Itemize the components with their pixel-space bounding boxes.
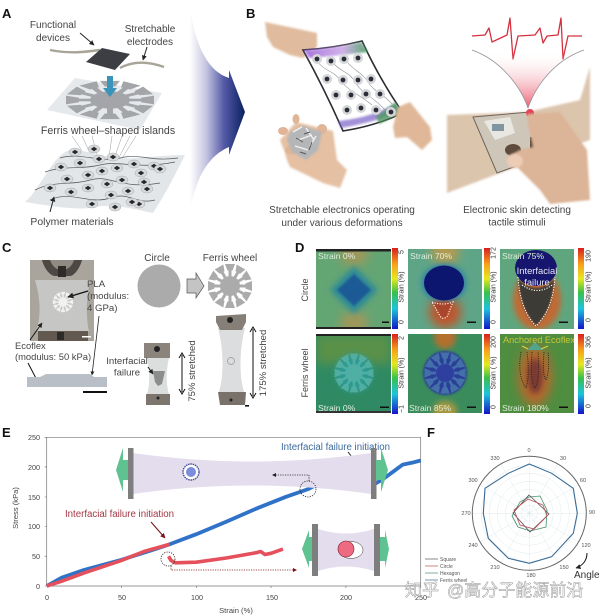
label: PLA modulus: (modulus: (87, 291, 129, 302)
strain map wheel 180% (500, 334, 575, 413)
angle labels: 120 (581, 543, 591, 549)
colorbar 4: −1 (398, 405, 406, 413)
hexagon series (512, 496, 547, 531)
angle labels: 180 (526, 573, 536, 579)
inset: circle specimen (302, 524, 389, 576)
x axis tick labels: 150 (266, 593, 278, 602)
y axis tick labels: 200 (28, 463, 40, 472)
row label circle: Circle (300, 278, 310, 302)
colorbar 2 (484, 247, 498, 329)
strain map circle 75%: Strain 75% (502, 251, 544, 261)
x axis tick labels (45, 593, 427, 602)
stretchable sheet with circuit islands (303, 41, 403, 131)
legend: Hexagon (440, 571, 460, 577)
ferris wheel plate (47, 78, 162, 130)
hand holding sheet right (393, 102, 432, 150)
panel B: applications (246, 6, 590, 229)
transition arrow circle to wheel (187, 273, 204, 298)
specimen photo (30, 260, 94, 341)
x axis title: Strain (%) (219, 606, 253, 615)
row label ferris wheel: Ferris wheel (300, 348, 310, 398)
strain map circle 75% (500, 249, 574, 330)
heading C: C (2, 240, 12, 255)
x axis tick labels: 100 (191, 593, 203, 602)
panel E: stress strain chart (2, 425, 427, 615)
red curve circle (47, 544, 283, 586)
arrow to electrode (143, 47, 147, 60)
blue annotation: Interfacial failure initiation (281, 442, 390, 453)
angle labels: 90 (589, 510, 595, 516)
colorbar 3: 190 (586, 250, 592, 262)
arrow to polymer (50, 197, 54, 212)
watermark: 知乎 (405, 581, 439, 600)
angle labels: 30 (560, 456, 566, 462)
label: ferris wheel: Ferris wheel (203, 253, 257, 264)
colorbar 3 (578, 248, 592, 329)
circle shape (138, 264, 180, 308)
arrow to ecoflex strip (28, 363, 39, 384)
label: 75% stretched: 75% stretched (187, 340, 198, 402)
label: stretchable electrodes: Stretchable (125, 24, 176, 35)
colorbar 6: Strain (%) (586, 357, 592, 389)
arrow to failure (148, 367, 153, 374)
connecting fan lines (72, 136, 136, 185)
arrow to PLA wheel (68, 291, 88, 297)
polar outer ring (472, 456, 586, 570)
arrow to ecoflex in photo (30, 323, 42, 340)
ferris wheel series (483, 464, 577, 563)
label: ferris wheel shaped islands: Ferris wheel–shaped islands (41, 125, 175, 137)
strain map circle 70%: Strain 70% (410, 251, 452, 261)
angle labels: 330 (490, 456, 500, 462)
arrow to blue failure (348, 452, 356, 462)
label: functional devices: devices (36, 33, 70, 44)
red annotation: Interfacial failure initiation (65, 509, 174, 520)
label: electronic skin caption: Electronic skin detecting (463, 205, 571, 216)
angle labels: 60 (580, 478, 586, 484)
colorbar 5: Strain ( %) (490, 356, 498, 390)
inset: ferris wheel specimen (116, 448, 388, 499)
label: electronic skin caption: tactile stimuli (488, 218, 546, 228)
x axis tick labels: 0 (45, 593, 49, 602)
y axis ticks (45, 437, 421, 588)
colorbar 2: 0 (490, 320, 498, 324)
angle labels: 240 (468, 543, 478, 549)
angle labels: 270 (461, 511, 471, 517)
dashed connector arrowhead blue (272, 473, 276, 477)
circle series (514, 499, 547, 529)
projection cone (472, 50, 584, 108)
label: PLA modulus: 4 GPa) (87, 303, 117, 314)
strain map circle 70% (408, 249, 482, 329)
y axis tick labels: 250 (28, 433, 40, 442)
strain map circle 75%: failure (524, 276, 550, 288)
label: stretchable electrodes: electrodes (127, 37, 173, 48)
label: ecoflex modulus: (modulus: 50 kPa) (15, 351, 91, 362)
colorbar 2: 172 (490, 247, 498, 259)
angle labels (461, 448, 595, 579)
thumb (507, 154, 523, 168)
colorbar 4: Strain (%) (398, 357, 406, 389)
x axis tick labels: 250 (415, 593, 427, 602)
colorbar 1: 0 (398, 320, 406, 324)
angle labels: 210 (490, 565, 500, 571)
strain map wheel 180%: Anchored Ecoflex (503, 335, 575, 345)
cross-section strip (27, 374, 107, 387)
strain map circle 75%: Interfacial (517, 265, 557, 276)
heading F: F (427, 425, 435, 440)
panel F: polar plot (425, 425, 600, 584)
strain map wheel 180%: Strain 180% (502, 403, 549, 413)
square series (513, 495, 549, 532)
double arrow 175% (250, 327, 256, 398)
x axis tick labels: 200 (340, 593, 352, 602)
y axis tick labels: 0 (36, 582, 40, 591)
label: polymer materials: Polymer materials (30, 217, 114, 228)
colorbar 5 (484, 334, 498, 414)
angle labels: 150 (559, 565, 569, 571)
panel D: strain maps (295, 238, 592, 421)
y axis tick labels: 50 (32, 552, 40, 561)
panel C: specimens (2, 240, 269, 407)
label: interfacial failure: failure (114, 368, 140, 378)
colorbar 6: 0 (586, 404, 592, 408)
colorbar 1: Strain (%) (398, 271, 406, 303)
dashed connector arrowhead red (293, 568, 297, 572)
angle labels: 300 (468, 478, 478, 484)
label: angle: Angle (574, 570, 600, 581)
strain map circle 0% (316, 249, 391, 329)
colorbar 3: 0 (586, 318, 592, 322)
dashed connector red (161, 552, 294, 570)
hand crumpling device (278, 114, 347, 188)
label: 175% stretched: 175% stretched (258, 330, 269, 396)
label: circle: Circle (144, 253, 170, 264)
legend: Square (440, 557, 456, 563)
x axis tick labels: 50 (118, 593, 126, 602)
strain map wheel 85%: Strain 85% (409, 403, 451, 413)
label: functional devices: Functional (30, 20, 76, 31)
colorbar 1: 5 (398, 250, 406, 254)
colorbar 4 (392, 334, 406, 414)
dashed connector blue (274, 475, 316, 497)
strain map wheel 0% (316, 334, 391, 413)
y axis tick labels: 100 (28, 522, 40, 531)
polymer sheet with islands (25, 145, 185, 213)
colorbar 5: 200 (490, 336, 498, 348)
axes frame (47, 437, 421, 586)
tall stretched specimen (216, 314, 246, 405)
colorbar 4: 2 (398, 336, 406, 340)
functional device chip (86, 48, 130, 70)
legend (425, 557, 467, 584)
y axis tick labels (28, 433, 40, 591)
stretchable electrode wires (50, 50, 164, 68)
arrow to strip from PLA (92, 316, 99, 375)
angle labels: 0 (527, 448, 531, 454)
y axis title: Stress (kPa) (11, 487, 20, 529)
legend: Ferris wheel (440, 578, 467, 584)
watermark: @高分子能源前沿 (447, 581, 583, 600)
blue assembly arrow (103, 76, 117, 97)
hand pressing patch (507, 112, 590, 204)
label: interfacial failure: Interfacial (106, 356, 148, 367)
colorbar 2: Strain (%) (490, 271, 498, 303)
strain map wheel 0%: Strain 0% (318, 403, 356, 413)
double arrow 75% (179, 353, 185, 394)
colorbar 5: 0 (490, 405, 498, 409)
big transition arrow A to B (190, 8, 245, 212)
angle arrow (576, 553, 587, 568)
heading A: A (2, 6, 12, 21)
legend: Circle (440, 564, 453, 570)
strain map circle 0%: Strain 0% (318, 251, 356, 261)
colorbar 6: 306 (586, 336, 592, 348)
label: stretchable electronics caption: Stretchable electronics operating (269, 205, 415, 216)
heading B: B (246, 6, 255, 21)
scale bar small (245, 405, 249, 407)
small stretched specimen (144, 343, 170, 405)
heading E: E (2, 425, 11, 440)
panel A: device fabrication schematic (2, 6, 185, 228)
colorbar 3: Strain (%) (586, 271, 592, 303)
label: PLA modulus: PLA (87, 279, 106, 290)
blue curve ferris wheel (47, 460, 421, 586)
colorbar 6 (578, 334, 592, 414)
pulse signal (472, 18, 582, 59)
polar grid (472, 456, 586, 570)
scale bar (83, 391, 107, 393)
arrow to red failure (151, 522, 165, 538)
strain map wheel 85% (408, 334, 482, 413)
colorbar 1 (392, 248, 406, 329)
hand holding sheet top (265, 22, 317, 58)
ferris wheel shape (208, 264, 252, 308)
label: ecoflex modulus: Ecoflex (15, 340, 46, 351)
arrow to device (80, 33, 94, 45)
heading D: D (295, 240, 304, 255)
y axis tick labels: 150 (28, 493, 40, 502)
forearm with skin patch (447, 67, 590, 193)
label: stretchable electronics caption: under various deformations (281, 218, 403, 229)
